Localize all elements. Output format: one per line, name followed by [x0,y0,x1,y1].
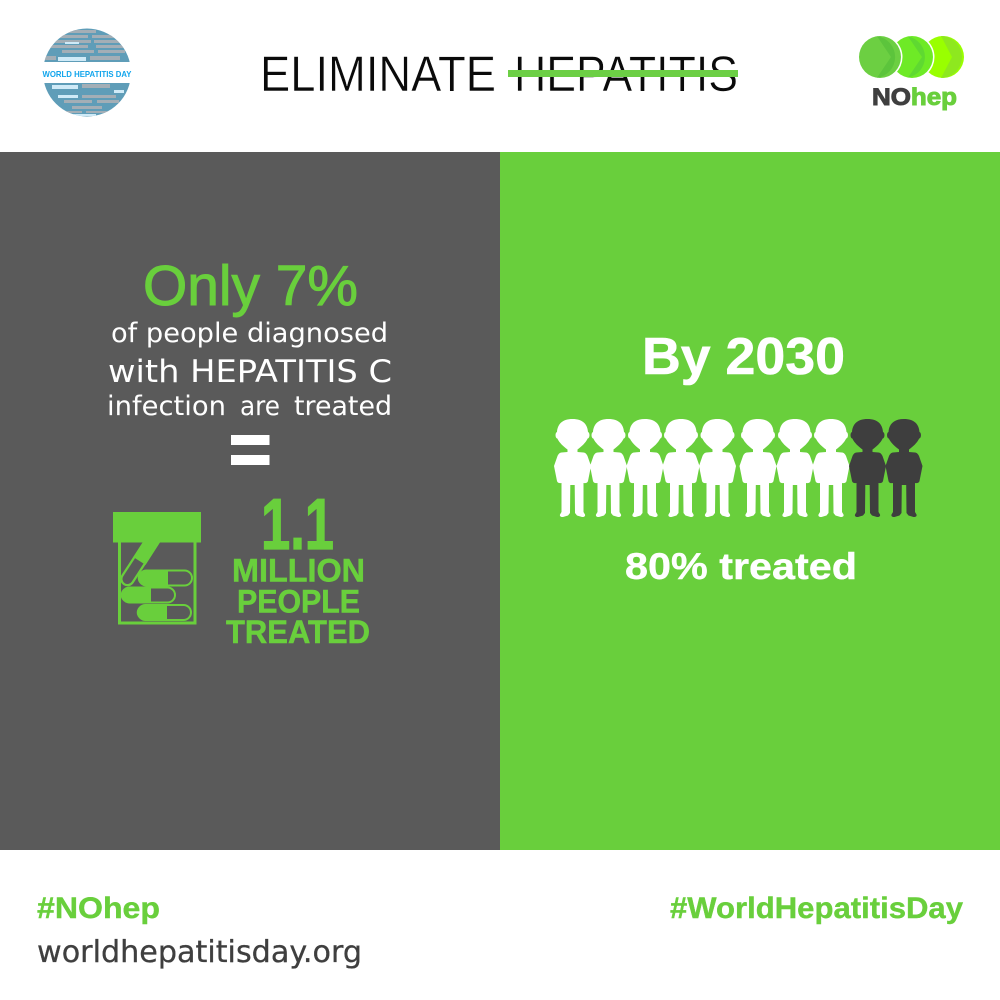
panel: header [42,28,964,116]
stat: 1.1 million people treated: 1.1 [261,485,334,565]
text: of people diagnosed: with HEPATITIS C [108,354,392,390]
text: of people diagnosed: of people diagnosed [111,318,388,349]
title: Eliminate Hepatitis [260,46,738,102]
NOhep wordmark: NOhep [872,84,957,111]
icon: equals sign [231,435,270,465]
globe label: WORLD HEPATITIS DAY [42,69,132,79]
heading: Only 7%: Only 7% [143,254,358,318]
stat: 1.1 million people treated: TREATED [226,614,370,650]
pictogram: ten people, eight treated [554,419,922,517]
text: of people diagnosed: are [240,391,280,422]
link: website: worldhepatitisday.org [37,935,362,970]
text: of people diagnosed: infection [107,391,226,422]
stat: 1.1 million people treated: PEOPLE [237,584,360,620]
stat: 1.1 million people treated [226,485,370,650]
heading: By 2030: By 2030 [642,328,845,386]
icon: NOhep logo [858,34,964,111]
hashtag: WorldHepatitisDay: #WorldHepatitisDay [670,892,963,925]
title: Eliminate Hepatitis: ELIMINATE [260,46,496,102]
text: of people diagnosed: treated [294,391,392,422]
caption: 80% treated: 80% treated [625,546,857,587]
title: Eliminate Hepatitis: HEPATITIS [514,46,738,102]
hashtag: NOhep: #NOhep [37,892,160,925]
icon: pill bottle [113,512,201,623]
icon: World Hepatitis Day globe logo [42,28,132,118]
stat: 1.1 million people treated: MILLION [232,552,365,588]
panel: left grey [0,152,500,850]
footer [37,892,963,970]
panel: right green [500,152,1000,850]
text: of people diagnosed [107,318,392,422]
